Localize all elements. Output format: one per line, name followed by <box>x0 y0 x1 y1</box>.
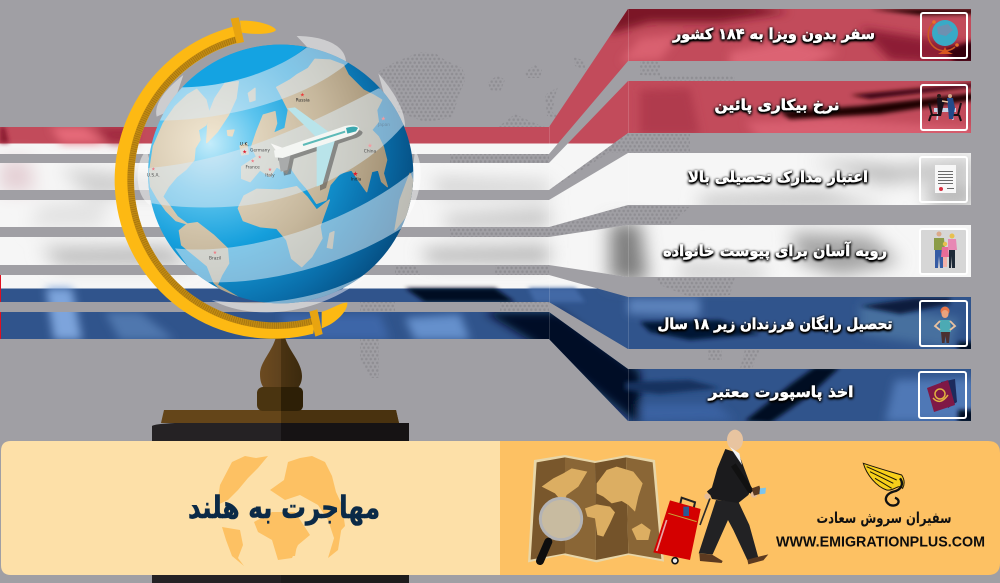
title: مهاجرت به هلند <box>188 490 380 526</box>
feature bar 1 <box>672 13 967 58</box>
map markers and place names <box>147 93 390 261</box>
globe sphere <box>148 44 414 304</box>
icon frame: young person <box>920 301 967 346</box>
logo: company name: سفیران سروش سعادت <box>816 509 952 527</box>
logo: winged bird <box>863 463 904 506</box>
walking traveller <box>699 430 768 564</box>
map markers and place names: ★ <box>242 150 247 156</box>
map markers and place names: ★ <box>381 116 386 123</box>
dotted world map backdrop <box>360 52 760 378</box>
map markers and place names: ★ <box>213 250 217 256</box>
ring arc <box>115 25 315 339</box>
icon frame: desk globe <box>921 13 967 58</box>
company logo <box>776 463 985 550</box>
map markers and place names: India <box>351 177 362 183</box>
arctic cap <box>182 44 306 88</box>
icon frame: family <box>920 229 967 274</box>
map markers and place names: China <box>364 148 377 154</box>
globe stand <box>152 337 409 583</box>
feature label: اعتبار مدارک تحصیلی بالا <box>688 168 868 186</box>
map markers and place names: U.K. <box>240 142 249 148</box>
map markers and place names: Brazil <box>209 255 221 261</box>
brass meridian ring <box>115 17 347 339</box>
map markers and place names: Italy <box>265 173 275 179</box>
map markers and place names: ★ <box>367 142 373 149</box>
stand: pedestal <box>152 423 409 583</box>
feature label: نرخ بیکاری پائین <box>714 96 840 115</box>
ring scale band <box>131 39 316 326</box>
feature bar 2 <box>714 85 967 130</box>
map markers and place names: Germany <box>250 148 270 154</box>
map markers and place names: Japan <box>377 122 390 128</box>
folded map with magnifier <box>528 455 664 562</box>
Dutch flag ribbons: six bands fanning out to the feature bars <box>0 9 971 421</box>
map markers and place names: ★ <box>251 158 255 164</box>
website address: WWW.EMIGRATIONPLUS.COM <box>776 534 985 550</box>
map markers and place names: ★ <box>151 167 155 173</box>
continents <box>149 59 415 297</box>
lower ring cap <box>322 303 347 328</box>
feature label: سفر بدون ویزا به ۱۸۴ کشور <box>672 25 875 43</box>
icon frame: business handshake <box>921 85 967 130</box>
map markers and place names: ★ <box>300 93 305 99</box>
feature bar 4 <box>663 229 967 274</box>
blue folds <box>46 288 975 425</box>
map markers and place names: France <box>245 164 260 170</box>
feature bar 5 <box>658 301 967 346</box>
bottom banner: brand panel <box>500 430 1000 575</box>
feature bar 3 <box>688 157 967 202</box>
map markers and place names: U.S.A. <box>147 173 160 179</box>
map markers and place names: ★ <box>258 155 262 161</box>
faded world map <box>217 456 345 566</box>
red folds <box>50 0 975 143</box>
map markers and place names: Russia <box>296 98 310 104</box>
map markers and place names: ★ <box>352 170 358 178</box>
icon frame: certificate document <box>920 157 967 202</box>
feature label: اخذ پاسپورت معتبر <box>707 383 854 402</box>
feature label: تحصیل رایگان فرزندان زیر ۱۸ سال <box>658 315 892 333</box>
map markers and place names: ★ <box>268 167 272 173</box>
globe with plane <box>138 36 421 320</box>
bottom banner: title panel <box>1 441 500 575</box>
feature bar 6 <box>707 372 966 418</box>
upper ring cap <box>240 21 276 34</box>
feature label: رویه آسان برای پیوست خانواده <box>663 242 887 261</box>
icon frame: passport <box>919 372 966 418</box>
translucent bands <box>148 47 414 304</box>
white folds <box>0 160 975 282</box>
glass shell reflections <box>138 36 421 312</box>
red suitcase <box>653 498 710 564</box>
airplane <box>271 107 363 191</box>
